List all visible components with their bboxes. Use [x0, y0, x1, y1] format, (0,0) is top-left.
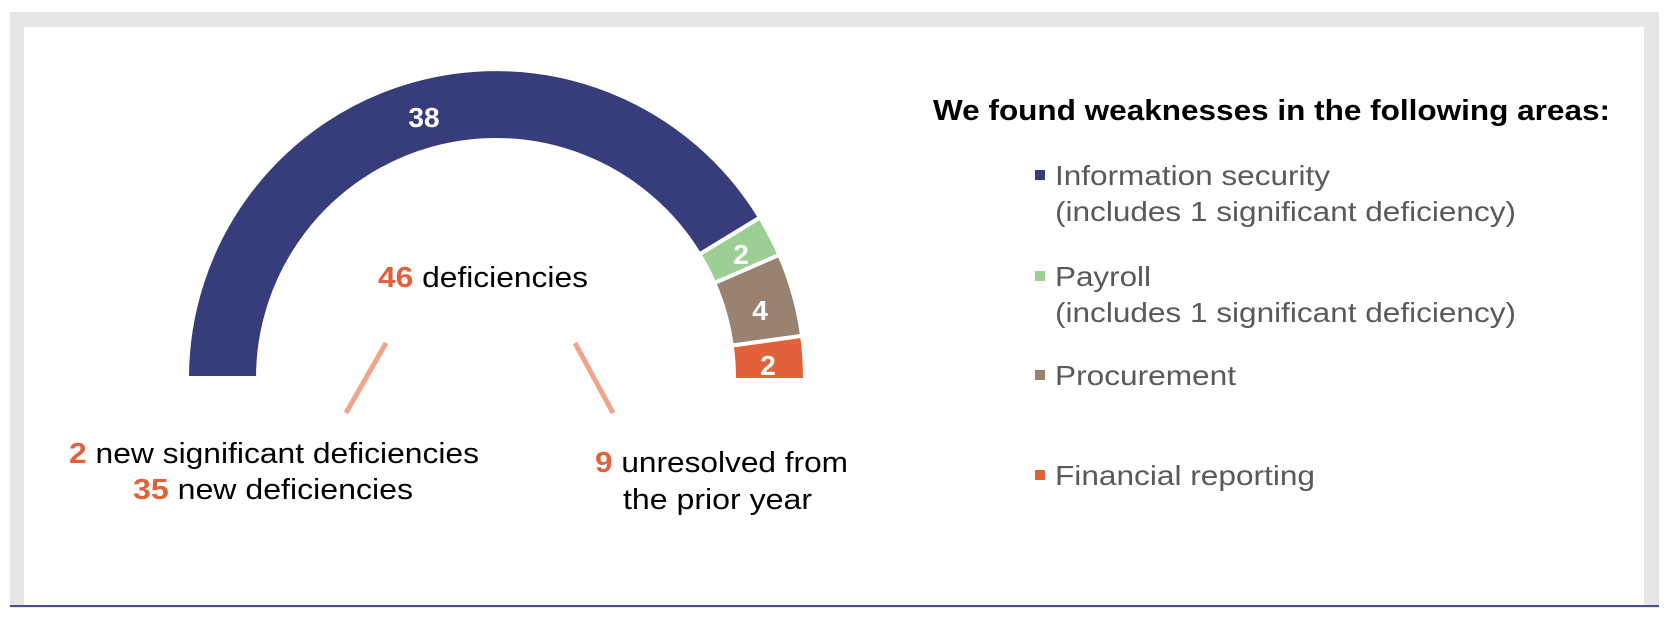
segment: financial reporting 2: [732, 336, 805, 380]
semicircle donut chart: [187, 69, 805, 380]
legend item: payroll: Payroll: [1055, 261, 1151, 292]
segment labels: [408, 102, 776, 381]
new deficiencies text: 2 new significant deficiencies: [69, 438, 479, 470]
segment: payroll 2: [699, 218, 779, 283]
unresolved text: [595, 447, 848, 516]
legend item: payroll: [1035, 261, 1516, 328]
legend item: information security: [1035, 160, 1516, 227]
legend item: financial reporting: Financial reporting: [1055, 460, 1315, 491]
segment labels: 2: [733, 239, 749, 270]
segment: information security 38: [187, 69, 760, 378]
unresolved text: 9 unresolved from: [595, 447, 848, 479]
connector lines: [346, 343, 613, 413]
legend item: procurement: Procurement: [1055, 360, 1236, 391]
new deficiencies text: 35 new deficiencies: [133, 474, 413, 506]
segment labels: 38: [408, 102, 440, 133]
center total label: 46 deficiencies: [378, 262, 588, 294]
segment: procurement 4: [714, 255, 802, 346]
legend item: information security: (includes 1 significant deficiency): [1055, 196, 1516, 227]
new deficiencies text: [69, 438, 479, 506]
legend: [1035, 160, 1516, 491]
segment labels: 2: [760, 350, 776, 381]
unresolved text: the prior year: [623, 484, 812, 516]
segment labels: 4: [752, 295, 768, 326]
legend item: payroll: (includes 1 significant deficiency): [1055, 297, 1516, 328]
legend item: information security: Information security: [1055, 160, 1330, 191]
legend title: We found weaknesses in the following areas:: [933, 95, 1610, 127]
